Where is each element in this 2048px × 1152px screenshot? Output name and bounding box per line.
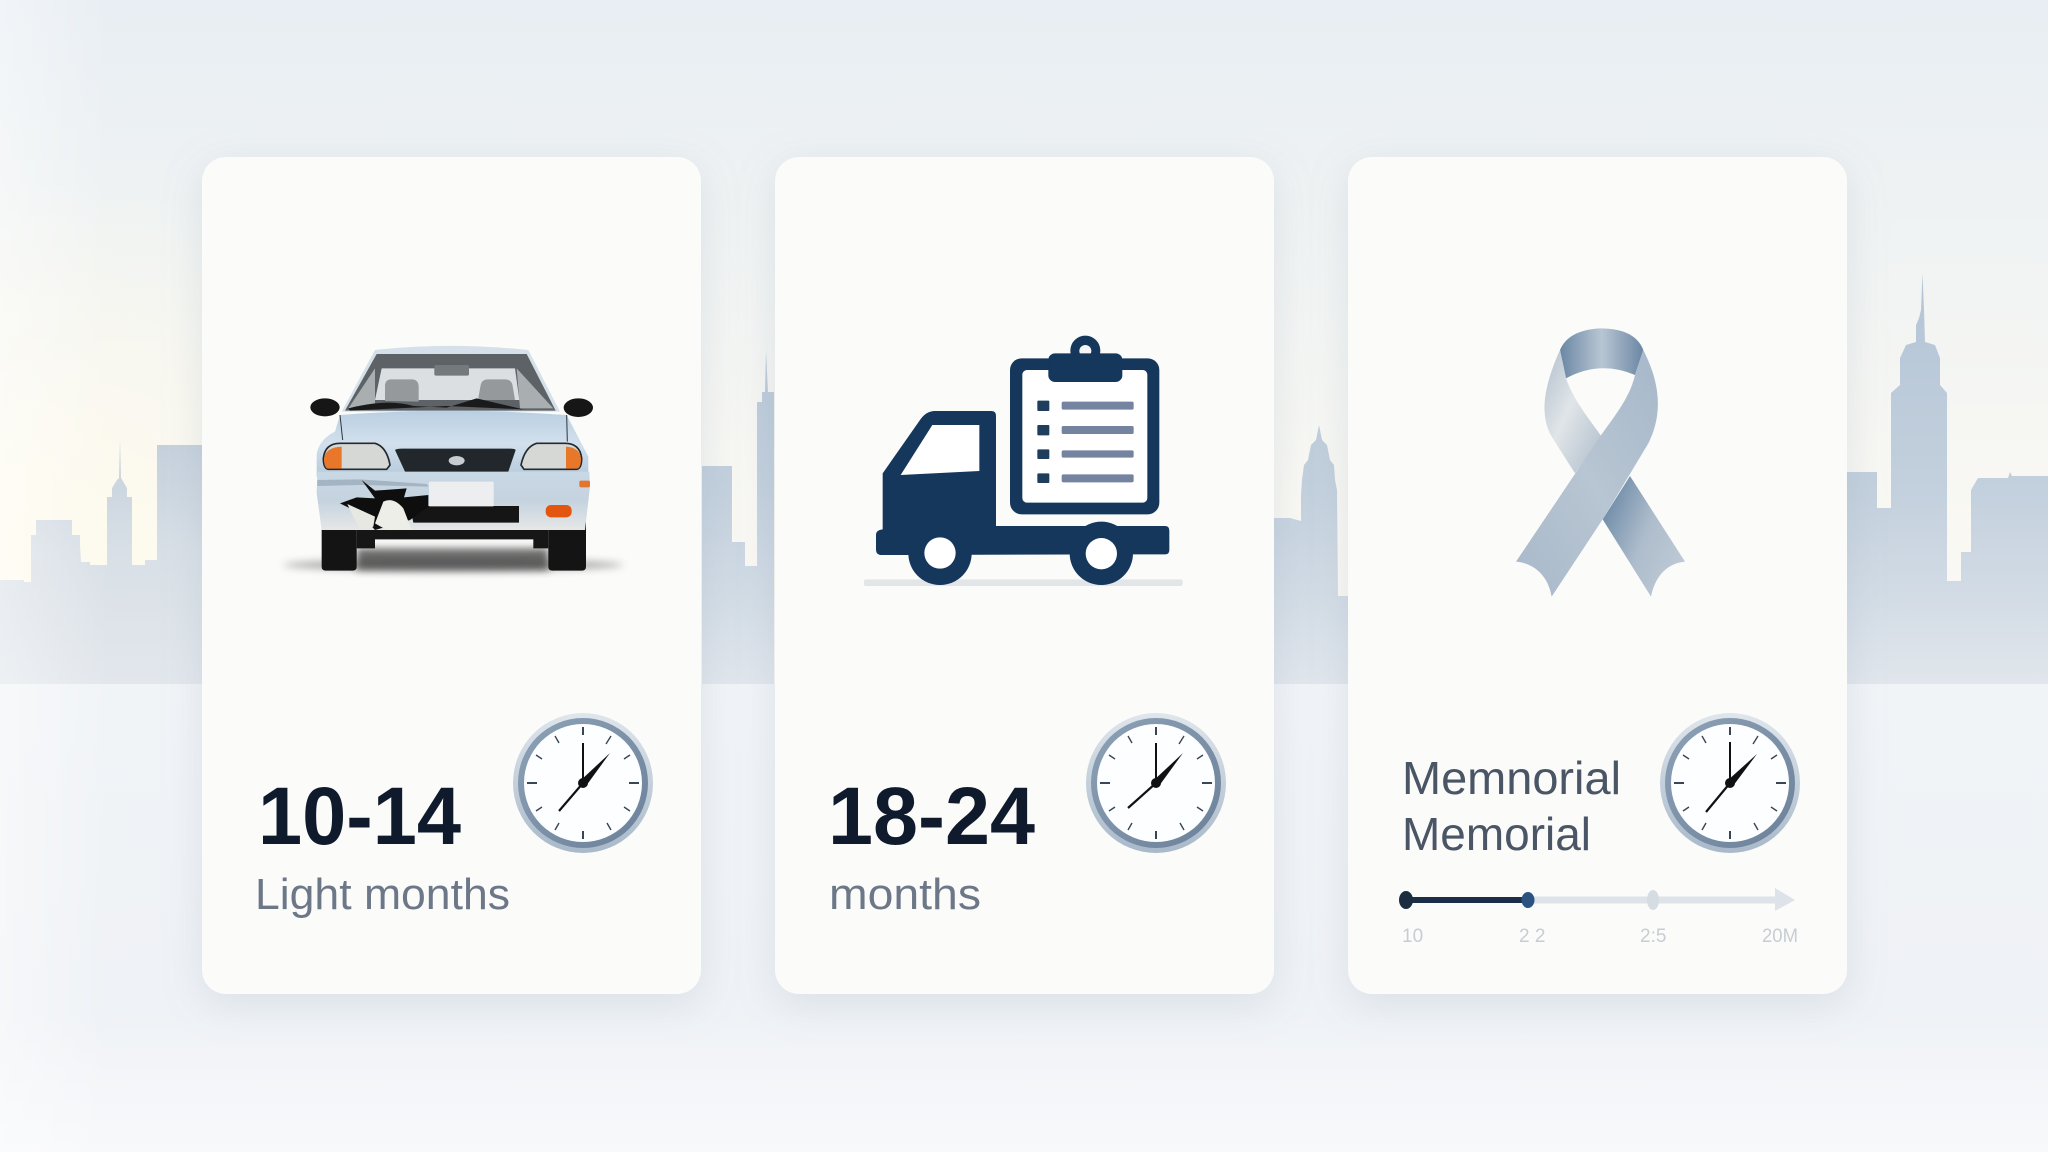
timeline: 20M <box>1762 926 1798 947</box>
memorial text: Memorial <box>1402 808 1591 860</box>
caption: months <box>829 870 981 919</box>
timeline: 2:5 <box>1640 926 1666 947</box>
background sky <box>0 0 2048 684</box>
skyline right <box>1847 273 2048 684</box>
clock 1 <box>513 713 653 853</box>
icon: ribbon <box>1516 328 1685 597</box>
icon: truck with clipboard <box>864 336 1183 586</box>
big number: 18-24 <box>828 771 1035 862</box>
clock 3 <box>1660 713 1800 853</box>
clock 2 <box>1086 713 1226 853</box>
memorial text: Memnorial <box>1402 752 1621 804</box>
big number: 10-14 <box>258 771 461 862</box>
timeline: 2 2 <box>1519 926 1545 947</box>
ground <box>0 684 2048 1152</box>
panel: card 1 <box>202 157 701 994</box>
panel: card 3 <box>1348 157 1847 994</box>
memorial text <box>1402 752 1621 860</box>
panel: card 2 <box>775 157 1274 994</box>
skyline middle left <box>702 350 774 684</box>
timeline: 10 <box>1402 926 1423 947</box>
skyline left <box>0 440 202 684</box>
icon: damaged car <box>283 346 623 571</box>
timeline <box>1399 888 1798 947</box>
skyline middle right <box>1274 425 1348 684</box>
caption: Light months <box>255 870 510 919</box>
warm glow <box>0 0 1100 684</box>
